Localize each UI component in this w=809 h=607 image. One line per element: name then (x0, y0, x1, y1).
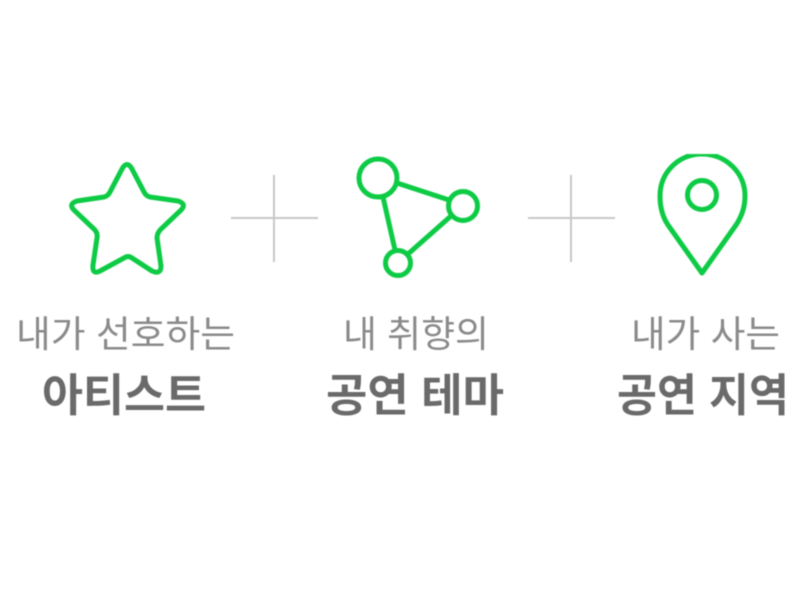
label: theme (326, 314, 504, 421)
label: artist: 아티스트 (42, 370, 206, 421)
label: region (617, 314, 789, 421)
label: theme: 공연 테마 (326, 370, 504, 421)
label: region: 내가 사는 (631, 314, 780, 355)
label: region: 공연 지역 (617, 370, 789, 421)
label: theme: 내 취향의 (343, 314, 489, 355)
icon: plus 1 (231, 175, 318, 262)
icon: plus 2 (528, 175, 615, 262)
icon: star (72, 164, 183, 272)
label: artist (16, 314, 235, 421)
label: artist: 내가 선호하는 (16, 314, 235, 355)
icon: network triangle (359, 159, 478, 276)
icon: location pin (660, 154, 745, 273)
